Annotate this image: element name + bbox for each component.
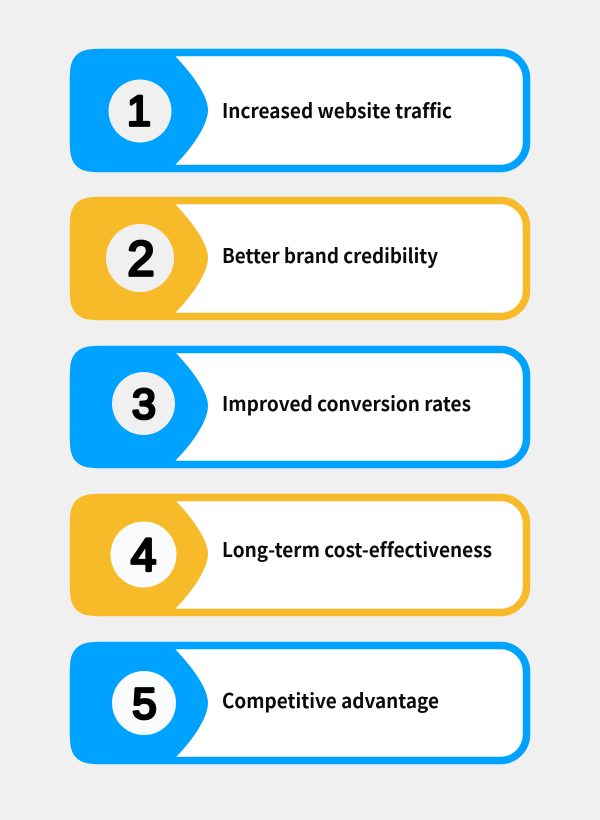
panel: item 2 better brand credibility	[70, 197, 526, 320]
text: item 2 label: Better brand credibility	[222, 240, 438, 269]
badge: number 2: 2	[127, 232, 155, 286]
text: item 5 label: Competitive advantage	[222, 685, 439, 714]
badge: number 1: 1	[127, 88, 151, 136]
panel: item 5 competitive advantage	[70, 642, 526, 764]
panel: item 4 long-term cost-effectiveness	[70, 494, 526, 616]
badge: number 5: 5	[132, 680, 157, 728]
panel: item 1 increased website traffic	[70, 49, 526, 172]
badge: number 4: 4	[131, 528, 156, 580]
badge: number 1	[108, 80, 172, 142]
text: item 1 label: Increased website traffic	[222, 95, 452, 124]
tab: item 5	[70, 642, 208, 764]
badge: number 3	[112, 372, 175, 435]
panel: item 3 improved conversion rates	[70, 346, 526, 468]
tab: item 2	[70, 197, 208, 320]
tab: item 3	[70, 346, 208, 468]
tab: item 4	[70, 494, 208, 616]
badge: number 4	[110, 522, 176, 588]
badge: number 3: 3	[132, 380, 156, 428]
text: item 3 label: Improved conversion rates	[222, 388, 471, 417]
text: item 4 label: Long-term cost-effectiveness	[222, 534, 492, 563]
badge: number 5	[112, 671, 176, 735]
tab: item 1	[70, 49, 208, 172]
badge: number 2	[106, 224, 174, 292]
